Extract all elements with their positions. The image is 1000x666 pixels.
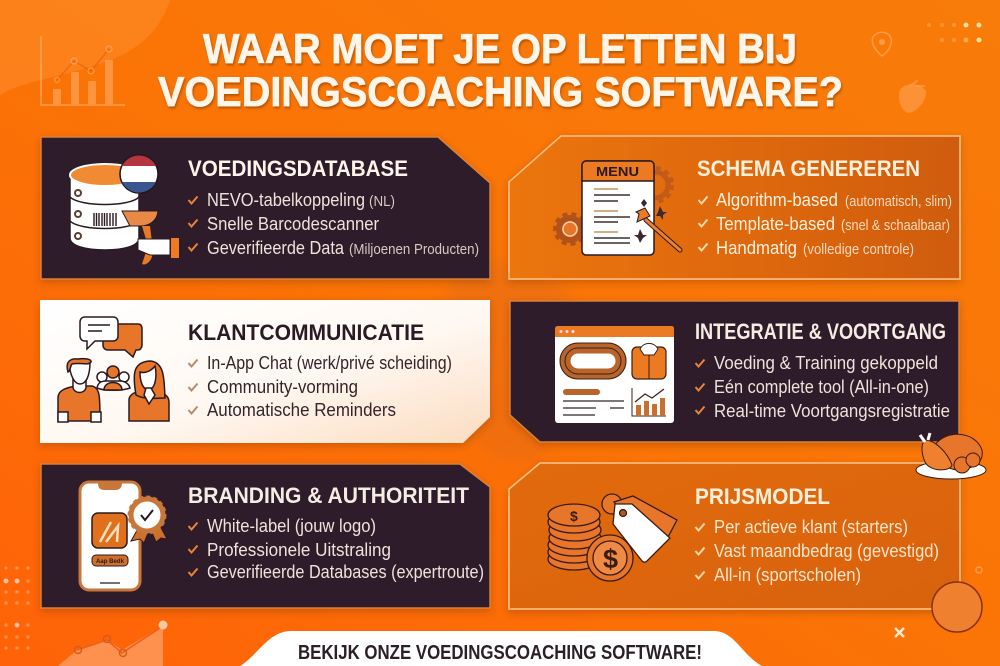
decoration: small ring <box>976 567 982 573</box>
checklist <box>696 353 950 421</box>
heading: BRANDING & AUTHORITEIT <box>188 483 470 508</box>
icon: coins and price tags: $ <box>603 544 618 574</box>
icon: orange <box>932 582 982 632</box>
checklist: All-in (sportscholen) <box>714 565 861 585</box>
checklist: (volledige controle) <box>803 241 914 258</box>
icon: phone with badge: Aap Bedk <box>96 558 124 565</box>
panel: schema genereren <box>509 136 960 279</box>
decoration: bottom-left chart <box>58 620 168 666</box>
checklist: Automatische Reminders <box>207 400 396 420</box>
checklist: Vast maandbedrag (gevestigd) <box>714 541 939 561</box>
checklist: Template-based <box>716 214 835 234</box>
checklist <box>698 190 952 258</box>
checklist: (automatisch, slim) <box>845 193 952 210</box>
checklist: Real-time Voortgangsregistratie <box>714 401 950 421</box>
call to action button <box>240 631 762 666</box>
checklist <box>696 517 939 585</box>
title: WAAR MOET JE OP LETTEN BIJ <box>203 25 797 72</box>
icon: dashboard window <box>555 326 674 423</box>
icon: close mark <box>895 628 904 637</box>
heading: PRIJSMODEL <box>695 484 830 509</box>
checklist <box>188 516 484 582</box>
checklist <box>188 353 452 420</box>
checklist: Handmatig <box>716 238 797 258</box>
icon: roast chicken on plate <box>916 433 986 479</box>
title <box>158 25 843 115</box>
checklist: Geverifieerde Databases (expertroute) <box>207 562 484 582</box>
heading: KLANTCOMMUNICATIE <box>188 320 424 345</box>
panel: branding en authoriteit <box>41 464 490 608</box>
checklist: (Miljoenen Producten) <box>349 241 479 258</box>
decoration: fruit and dots top-right <box>872 22 982 113</box>
decoration: top-left chart <box>41 36 125 105</box>
checklist: In-App Chat (werk/privé scheiding) <box>207 353 452 373</box>
checklist: NEVO-tabelkoppeling <box>207 190 365 210</box>
heading: INTEGRATIE & VOORTGANG <box>695 319 946 344</box>
panel: integratie en voortgang <box>510 301 959 442</box>
checklist: Snelle Barcodescanner <box>207 214 379 234</box>
icon: menu with gears and wand <box>555 161 680 255</box>
icon: coins and price tags <box>548 494 677 581</box>
icon: coins and price tags: $ <box>570 508 578 524</box>
checklist: Per actieve klant (starters) <box>714 517 908 537</box>
checklist: Algorithm-based <box>716 190 838 210</box>
checklist: Voeding & Training gekoppeld <box>714 353 938 373</box>
panel: prijsmodel <box>509 463 960 609</box>
heading: SCHEMA GENEREREN <box>697 156 920 181</box>
checklist: Professionele Uitstraling <box>207 540 391 560</box>
checklist: Geverifieerde Data <box>207 238 345 258</box>
checklist: White-label (jouw logo) <box>207 516 376 536</box>
icon: phone with badge <box>80 482 167 590</box>
checklist: (NL) <box>369 193 395 210</box>
panel: klantcommunicatie <box>40 300 490 443</box>
checklist: (snel & schaalbaar) <box>841 217 950 234</box>
panel: voedingsdatabase <box>41 137 490 279</box>
call to action button: BEKIJK ONZE VOEDINGSCOACHING SOFTWARE! <box>298 642 702 664</box>
title: VOEDINGSCOACHING SOFTWARE? <box>158 68 843 115</box>
checklist: Community-vorming <box>207 377 358 397</box>
icon: menu with gears and wand: MENU <box>596 165 639 179</box>
icon: people with chat bubbles <box>58 317 169 422</box>
decoration: left dots <box>4 566 30 650</box>
checklist <box>188 190 479 258</box>
checklist: Eén complete tool (All-in-one) <box>714 377 929 397</box>
heading: VOEDINGSDATABASE <box>188 156 408 181</box>
icon: database with flag and scanner <box>70 155 179 264</box>
